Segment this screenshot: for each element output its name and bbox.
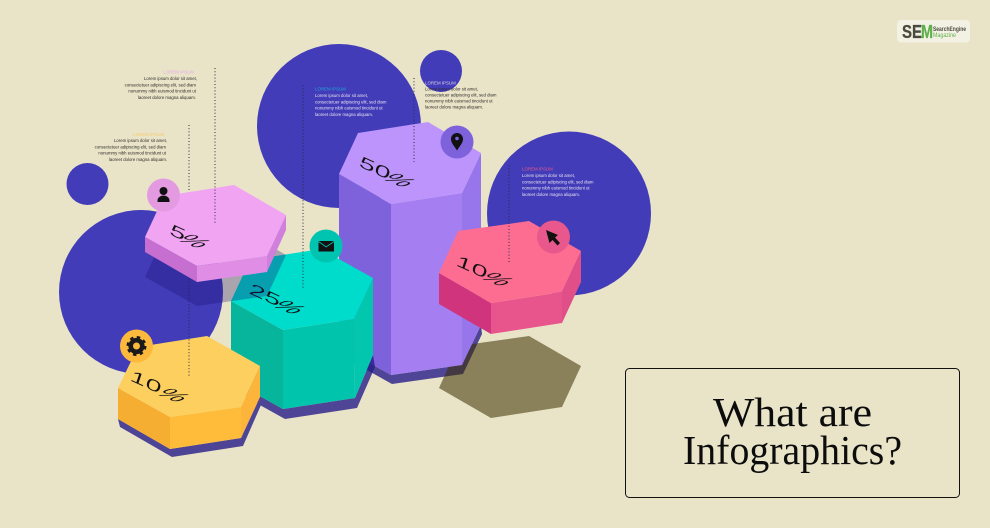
text block: top left: Lorem ipsum dolor sit amet,: [144, 76, 197, 81]
column: red 10%: [439, 221, 581, 334]
icon: envelope: [310, 230, 342, 262]
column: teal 25%: %: [264, 298, 315, 316]
title: [683, 389, 902, 473]
text block: middle left: [95, 132, 167, 162]
column: orange 10%: 10: [128, 367, 164, 398]
column: red 10%: 10: [454, 252, 490, 283]
column: pink 5%: [145, 185, 286, 282]
title: Infographics?: [683, 427, 902, 473]
text block: top left: laoreet dolore magna aliquam.: [138, 95, 196, 100]
shadow: pink hexagon: [145, 225, 286, 306]
text block: middle left: Lorem ipsum dolor sit amet,: [114, 138, 167, 143]
column: teal 25%: 25: [247, 280, 283, 311]
text block: top left: LOREM IPSUM: [163, 70, 194, 74]
column: teal 25%: [231, 249, 375, 419]
text block: right circle: laoreet dolore magna aliquam.: [522, 192, 580, 197]
text block: right circle: Lorem ipsum dolor sit amet,: [522, 173, 575, 178]
column: pink 5%: %: [169, 232, 220, 250]
logo: SEM Search Engine Magazine: M: [921, 22, 933, 42]
column: purple 50%: [339, 122, 581, 418]
column: red 10%: %: [472, 270, 523, 288]
title: What are: [713, 389, 872, 435]
column: purple 50%: %: [374, 171, 425, 189]
text block: top right: [425, 80, 497, 110]
text block: top left: [125, 70, 197, 100]
icon: cursor: [537, 220, 570, 254]
text block: right circle: nonummy nibh euismod tincidunt ut: [522, 186, 590, 190]
logo: SEM Search Engine Magazine: Magazine: [933, 33, 957, 39]
column: orange 10%: %: [148, 386, 199, 404]
text block: middle left: laoreet dolore magna aliquam.: [109, 157, 167, 162]
text block: top right: Lorem ipsum dolor sit amet,: [425, 86, 478, 92]
text block: top right: nonummy nibh euismod tincidunt ut: [425, 98, 493, 104]
text block: top centre circle: consectetuer adipiscing elit, sed diam: [315, 100, 387, 104]
text block: right circle: [522, 166, 594, 197]
text block: top centre circle: LOREM IPSUM: [315, 86, 346, 92]
dotted leader line: orange: [188, 125, 190, 377]
column: orange 10%: [118, 336, 261, 457]
text block: middle left: nonummy nibh euismod tincidunt ut: [98, 150, 167, 156]
text block: top centre circle: nonummy nibh euismod tincidunt ut: [315, 106, 383, 110]
icon: gear: [120, 330, 153, 362]
background circles: [59, 44, 651, 374]
column: purple 50%: 50: [357, 153, 393, 184]
icon: location pin: [440, 126, 474, 158]
logo: SEM Search Engine Magazine: SE: [902, 22, 922, 42]
title box: [626, 368, 960, 498]
text block: right circle: LOREM IPSUM: [522, 166, 553, 172]
text block: top left: nonummy nibh euismod tincidunt ut: [128, 88, 197, 94]
text block: middle left: LOREM IPSUM: [133, 132, 164, 137]
text block: top right: LOREM IPSUM: [425, 80, 456, 86]
text block: right circle: consectetuer adipiscing elit, sed diam: [522, 180, 594, 184]
text block: top left: consectetuer adipiscing elit, sed diam: [125, 82, 196, 88]
text block: top centre circle: laoreet dolore magna aliquam.: [315, 112, 373, 117]
text block: middle left: consectetuer adipiscing elit, sed diam: [95, 144, 166, 150]
column: pink 5%: 5: [167, 221, 188, 245]
logo: SEM Search Engine Magazine: [897, 20, 970, 42]
text block: top right: laoreet dolore magna aliquam.: [425, 104, 483, 110]
dotted leader lines: [215, 68, 509, 288]
text block: top right: consectetuer adipiscing elit, sed diam: [425, 92, 497, 98]
icon: person: [147, 178, 180, 212]
logo: SEM Search Engine Magazine: SearchEngine: [933, 27, 967, 33]
text block: top centre circle: Lorem ipsum dolor sit amet,: [315, 93, 368, 98]
text block: top centre circle: [315, 86, 387, 117]
